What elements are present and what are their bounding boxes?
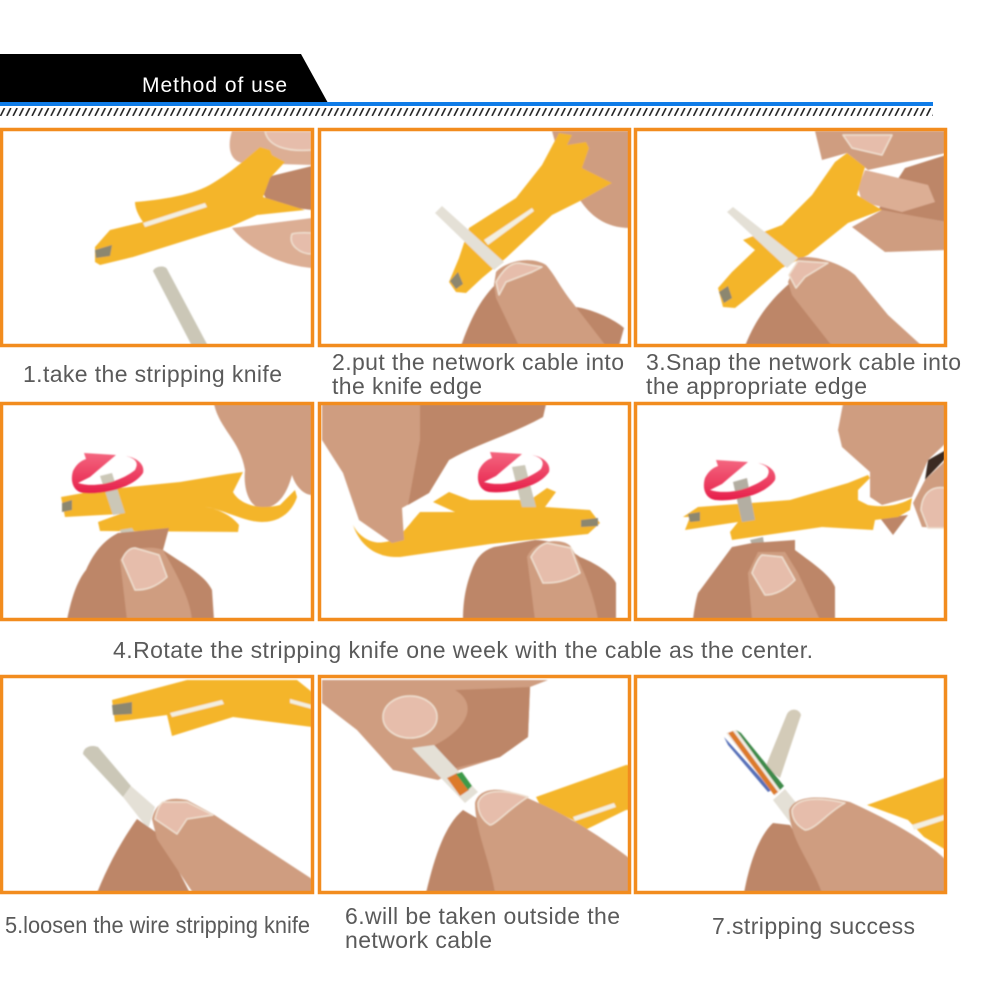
stripping knife bbox=[112, 680, 312, 736]
caption: step 1: 1.take the stripping knife bbox=[23, 361, 282, 387]
fingertip below loop bbox=[880, 515, 908, 535]
right hand bbox=[552, 131, 630, 228]
lower hand bbox=[461, 260, 624, 346]
panel: step 5 photo bbox=[320, 404, 630, 620]
caption: step 6 bbox=[345, 903, 620, 953]
panel: step 1 photo bbox=[2, 130, 312, 346]
header banner bbox=[0, 54, 933, 116]
cable with wires bbox=[412, 745, 478, 803]
caption: step 2: the knife edge bbox=[332, 373, 482, 399]
stripping knife bbox=[95, 147, 305, 265]
upper hand bbox=[838, 404, 946, 528]
cable bbox=[435, 206, 504, 270]
caption: step 5: 5.loosen the wire stripping knife bbox=[5, 912, 310, 938]
rotation arrow bbox=[704, 460, 775, 500]
panel: step 2 photo bbox=[320, 130, 630, 346]
stripping knife bbox=[449, 133, 612, 293]
cable bbox=[773, 789, 806, 825]
stripping knife bbox=[536, 765, 632, 830]
panel: step 8 photo bbox=[320, 676, 632, 893]
lower hand bbox=[426, 790, 632, 893]
caption: step 3: the appropriate edge bbox=[646, 373, 867, 399]
caption: step 6: 6.will be taken outside the bbox=[345, 903, 620, 929]
upper hand bbox=[214, 404, 312, 508]
panel: step 9 photo bbox=[636, 676, 946, 893]
hand bbox=[744, 797, 946, 893]
stripping knife bbox=[867, 777, 946, 850]
panel: step 4 photo bbox=[2, 404, 312, 620]
caption: step 3 bbox=[646, 349, 961, 399]
hand holding knife bbox=[230, 131, 312, 268]
cable bbox=[100, 473, 125, 515]
hand bbox=[97, 799, 312, 893]
caption: step 6: network cable bbox=[345, 927, 492, 953]
caption: step 3: 3.Snap the network cable into bbox=[646, 349, 961, 375]
caption: step 2: 2.put the network cable into bbox=[332, 349, 624, 375]
exposed wires bbox=[724, 730, 784, 796]
panel: step 7 photo bbox=[2, 676, 312, 893]
title: Method of use bbox=[142, 74, 287, 97]
panel: step 3 photo bbox=[636, 130, 946, 346]
stripping knife bbox=[353, 488, 600, 557]
rotation arrow bbox=[478, 452, 549, 492]
upper hand bbox=[322, 404, 546, 543]
lower hand bbox=[67, 528, 214, 620]
cable bbox=[727, 207, 798, 268]
rotation arrow bbox=[72, 453, 143, 493]
stripping knife bbox=[718, 153, 882, 308]
cable bbox=[512, 465, 536, 507]
caption: step 2 bbox=[332, 349, 624, 399]
stripping knife bbox=[683, 475, 912, 540]
lower hand bbox=[693, 540, 835, 620]
lower hand bbox=[463, 540, 616, 620]
cable bbox=[153, 267, 208, 346]
cable bbox=[83, 746, 155, 829]
upper hand bbox=[322, 680, 548, 780]
stripping knife bbox=[61, 472, 297, 532]
lower hand bbox=[745, 257, 922, 346]
right hand bbox=[815, 131, 946, 252]
caption: step 7: 7.stripping success bbox=[712, 913, 915, 939]
cable bbox=[733, 478, 755, 522]
caption: step 4: 4.Rotate the stripping knife one week with the cable as the center. bbox=[113, 637, 813, 663]
removed cable jacket bbox=[765, 710, 801, 778]
panel: step 6 photo bbox=[636, 404, 946, 620]
